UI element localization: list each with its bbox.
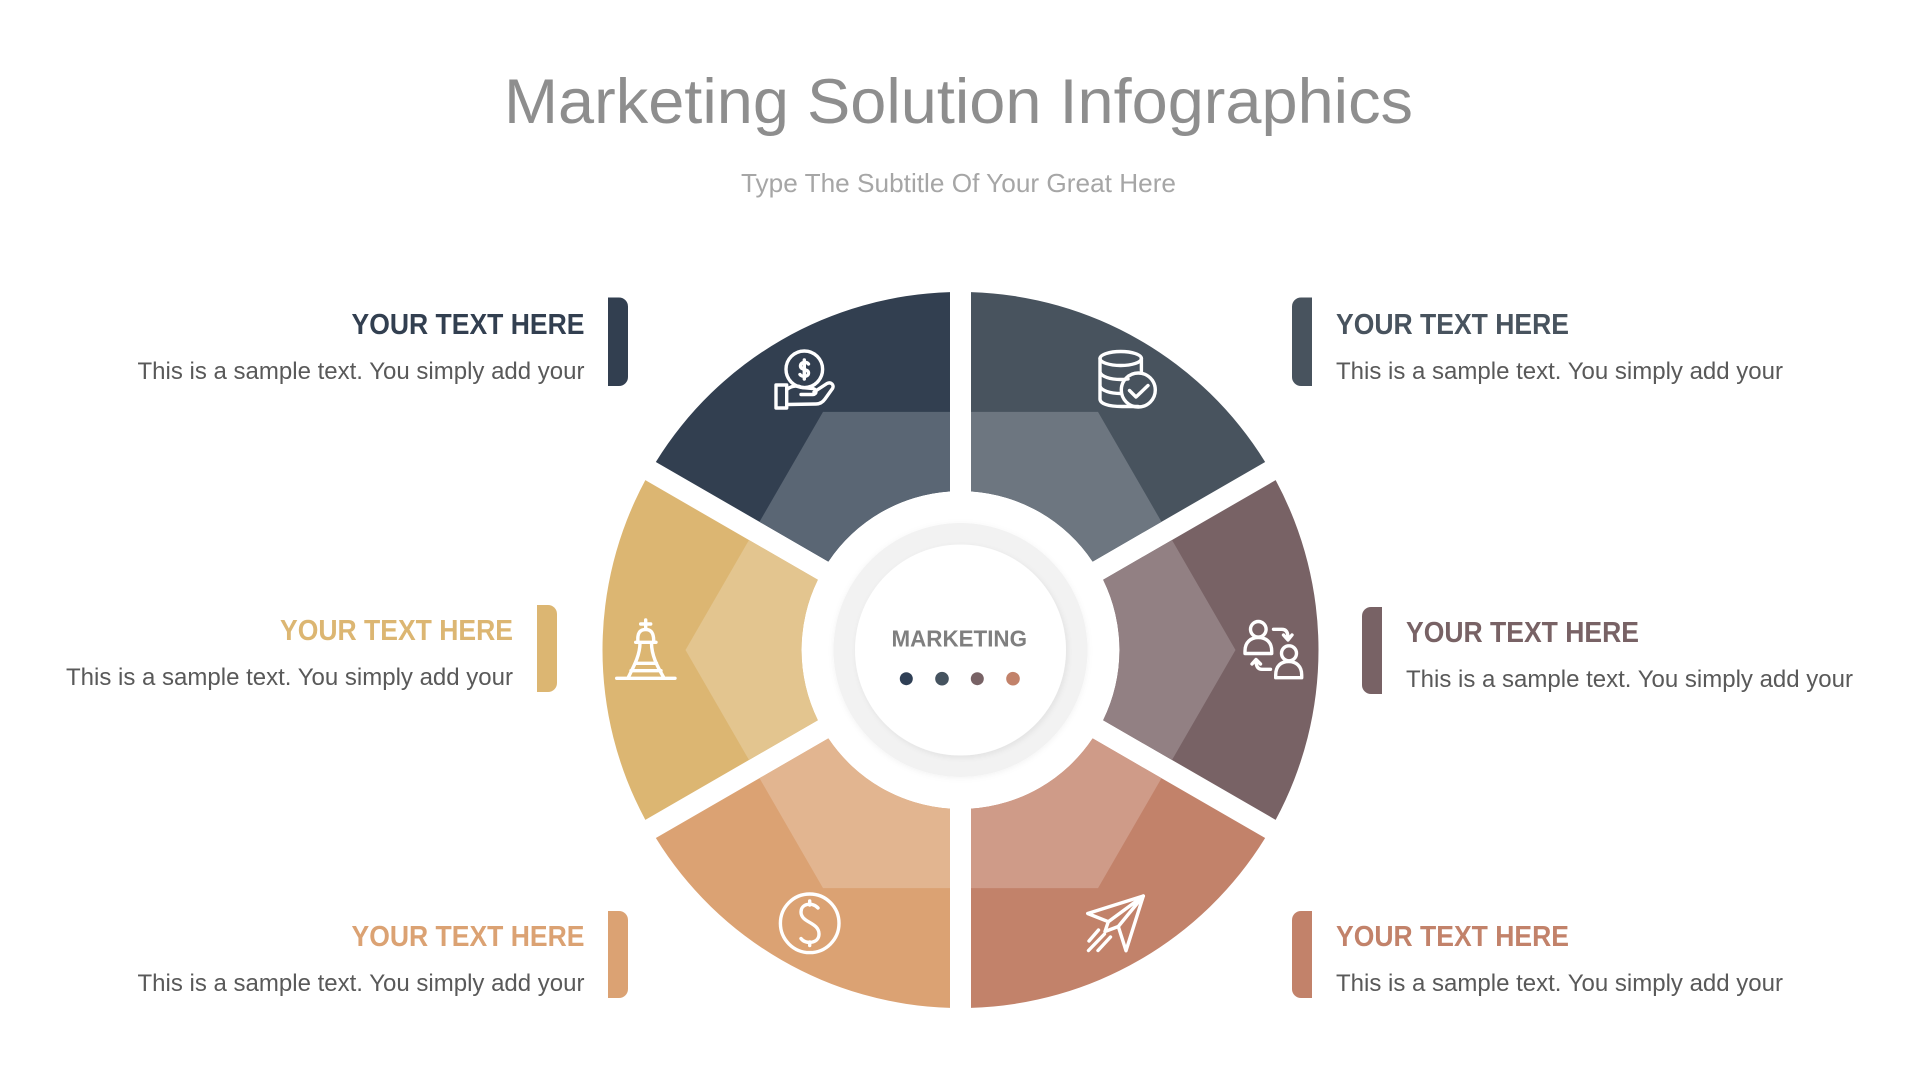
heading: YOUR TEXT HERE bbox=[1406, 617, 1639, 649]
body text: This is a sample text. You simply add your bbox=[1336, 970, 1783, 997]
subtitle: Type The Subtitle Of Your Great Here bbox=[741, 168, 1176, 198]
icon: database with check bbox=[1100, 352, 1155, 407]
body text: This is a sample text. You simply add your bbox=[138, 970, 584, 997]
body text: This is a sample text. You simply add your bbox=[66, 664, 513, 691]
body text: This is a sample text. You simply add your bbox=[1406, 666, 1853, 693]
segment: top right bbox=[971, 292, 1265, 562]
icon: chess piece bbox=[617, 620, 675, 678]
segment: right bbox=[1103, 480, 1318, 820]
callout: right bbox=[1362, 607, 1853, 694]
segment: bottom right bbox=[971, 738, 1266, 1008]
hub label: MARKETING bbox=[892, 626, 1027, 652]
body text: This is a sample text. You simply add your bbox=[1336, 358, 1783, 385]
body text: This is a sample text. You simply add your bbox=[138, 358, 584, 385]
icon: two people exchanging bbox=[1245, 622, 1302, 678]
segment: left bbox=[602, 480, 818, 820]
heading: YOUR TEXT HERE bbox=[280, 615, 513, 647]
segment: bottom left bbox=[656, 738, 950, 1008]
center hub bbox=[834, 523, 1088, 777]
callout: bottom left bbox=[138, 911, 628, 998]
icon: paper plane bbox=[1088, 896, 1143, 951]
heading: YOUR TEXT HERE bbox=[352, 309, 584, 341]
segment: top left bbox=[656, 292, 950, 562]
callout: bottom right bbox=[1292, 911, 1783, 998]
callout: left bbox=[66, 605, 557, 692]
callout: top left bbox=[138, 298, 628, 386]
icon: hand holding coin bbox=[776, 351, 833, 408]
heading: YOUR TEXT HERE bbox=[1336, 921, 1569, 953]
icon: dollar coin bbox=[780, 894, 839, 953]
heading: YOUR TEXT HERE bbox=[1336, 309, 1569, 341]
hub dots bbox=[900, 672, 1020, 686]
callout: top right bbox=[1292, 298, 1783, 386]
title: Marketing Solution Infographics bbox=[504, 67, 1413, 137]
heading: YOUR TEXT HERE bbox=[352, 921, 584, 953]
